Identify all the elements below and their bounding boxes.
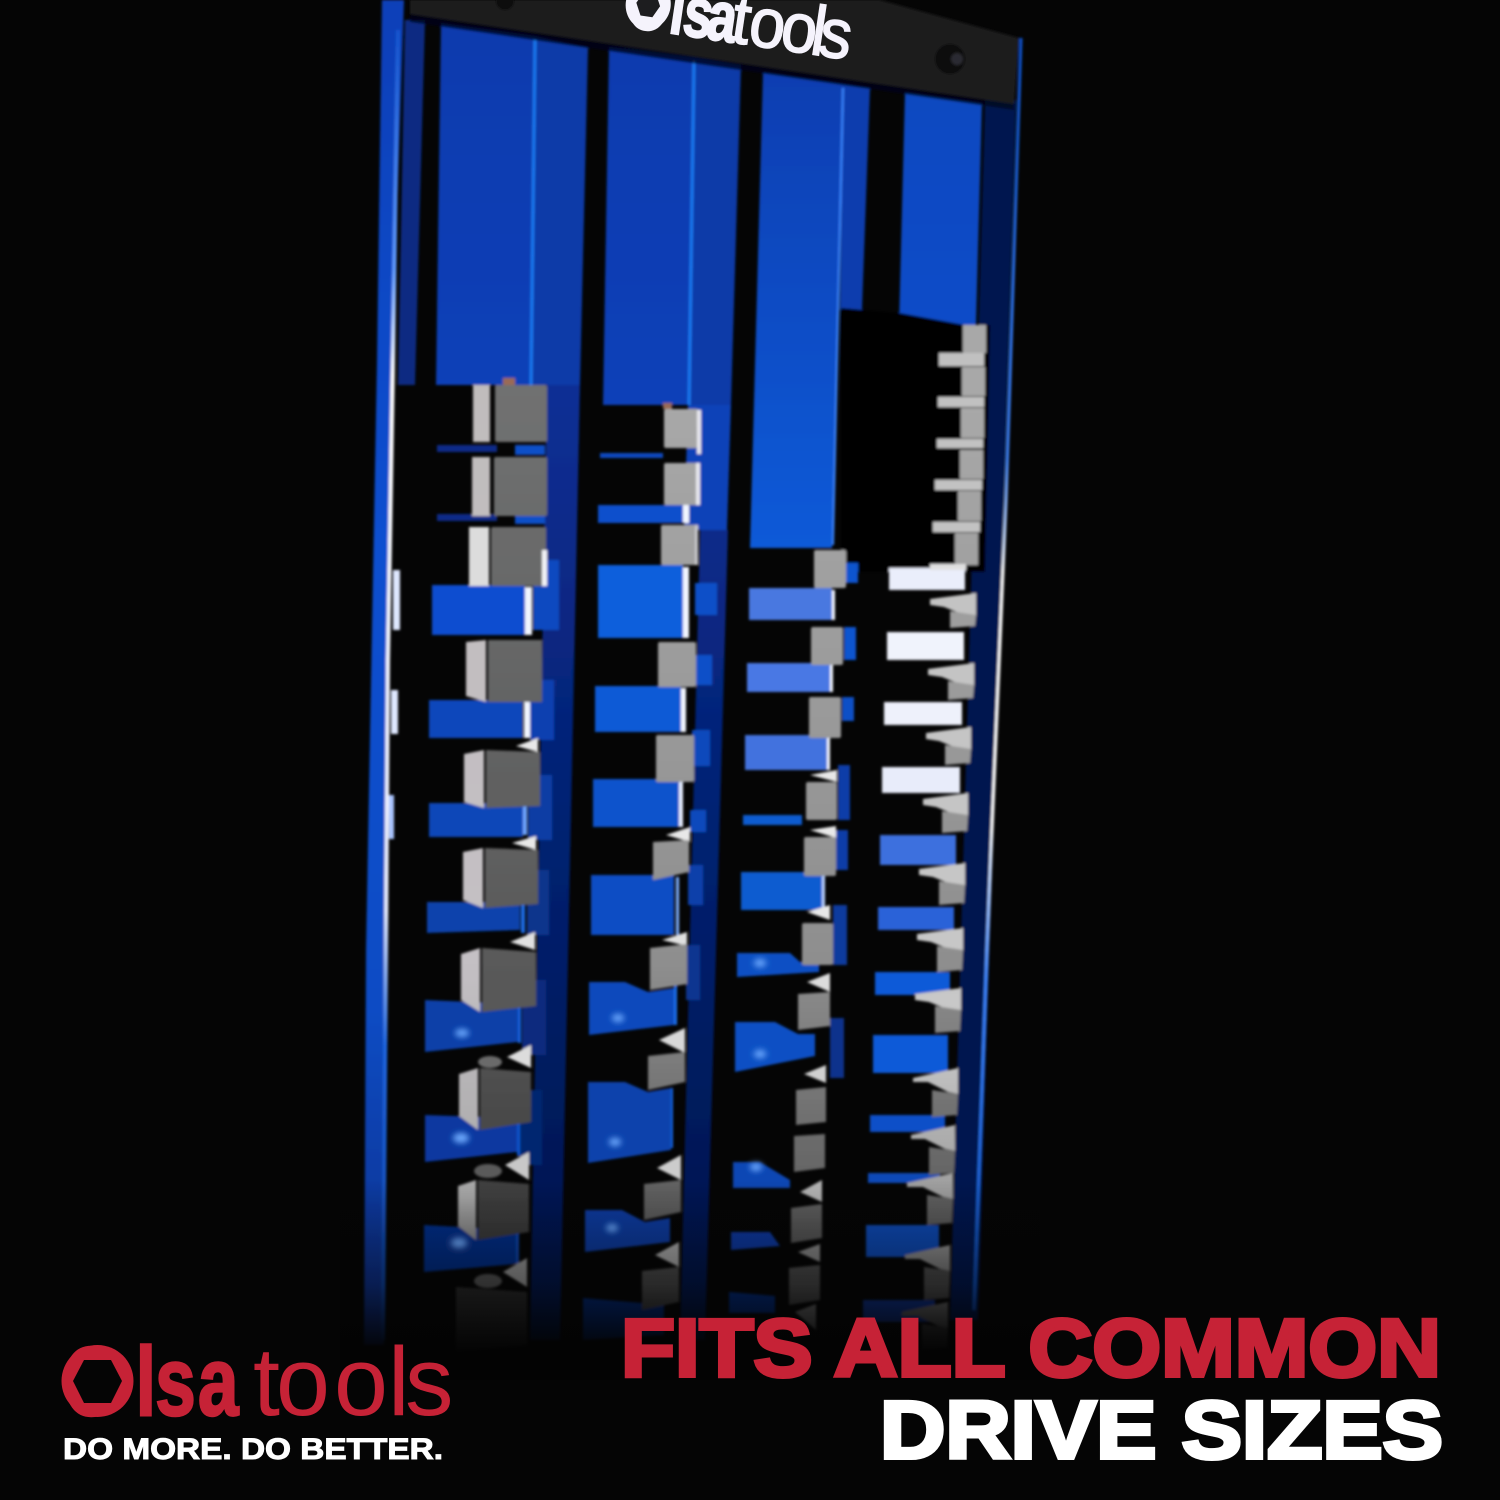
- bottom fade: [340, 1180, 1040, 1380]
- column 3 sockets: [789, 550, 846, 1330]
- shadow behind column 4 top sockets: [841, 308, 990, 572]
- column 3 blue rows: [729, 563, 858, 1313]
- photo: blue socket organizer panel: [364, 0, 1021, 1352]
- heading: line two: DRIVE SIZES: [880, 1385, 1443, 1476]
- panel: right rail: [950, 38, 1021, 1320]
- channel 1 upper: [436, 23, 588, 385]
- column 4 sockets: [902, 325, 986, 1350]
- column 2 blue rows: [583, 453, 717, 1340]
- icon: hex nut O: [62, 1345, 134, 1417]
- logo: Olsatools: Olsa: [63, 1328, 240, 1436]
- heading: line one: FITS ALL COMMON: [621, 1303, 1441, 1394]
- panel: left rail: [364, 0, 425, 1345]
- glow reflections: [451, 959, 766, 1248]
- icon: bar screw: [935, 44, 965, 74]
- column 1 sockets: [456, 378, 547, 1352]
- channel 3 upper: [750, 72, 870, 548]
- tagline: DO MORE. DO BETTER.: [63, 1433, 443, 1466]
- column 4 bright rows: [863, 568, 965, 1322]
- logo: Olsatools: tools: [253, 1327, 454, 1436]
- logo on bar: [620, 0, 858, 75]
- panel: header bar shadow: [410, 14, 1014, 110]
- icon: hex nut O on bar: [622, 0, 674, 33]
- icon: top screw: [496, 0, 514, 10]
- logo: Olsatools: [62, 1327, 454, 1436]
- dark side strips: [530, 385, 728, 1340]
- channel 2 upper: [603, 47, 741, 530]
- channel 4 upper: [899, 92, 982, 325]
- panel: black header bar: [410, 0, 1019, 104]
- column 2 sockets: [642, 403, 701, 1310]
- column 1 blue rows: [424, 445, 559, 1272]
